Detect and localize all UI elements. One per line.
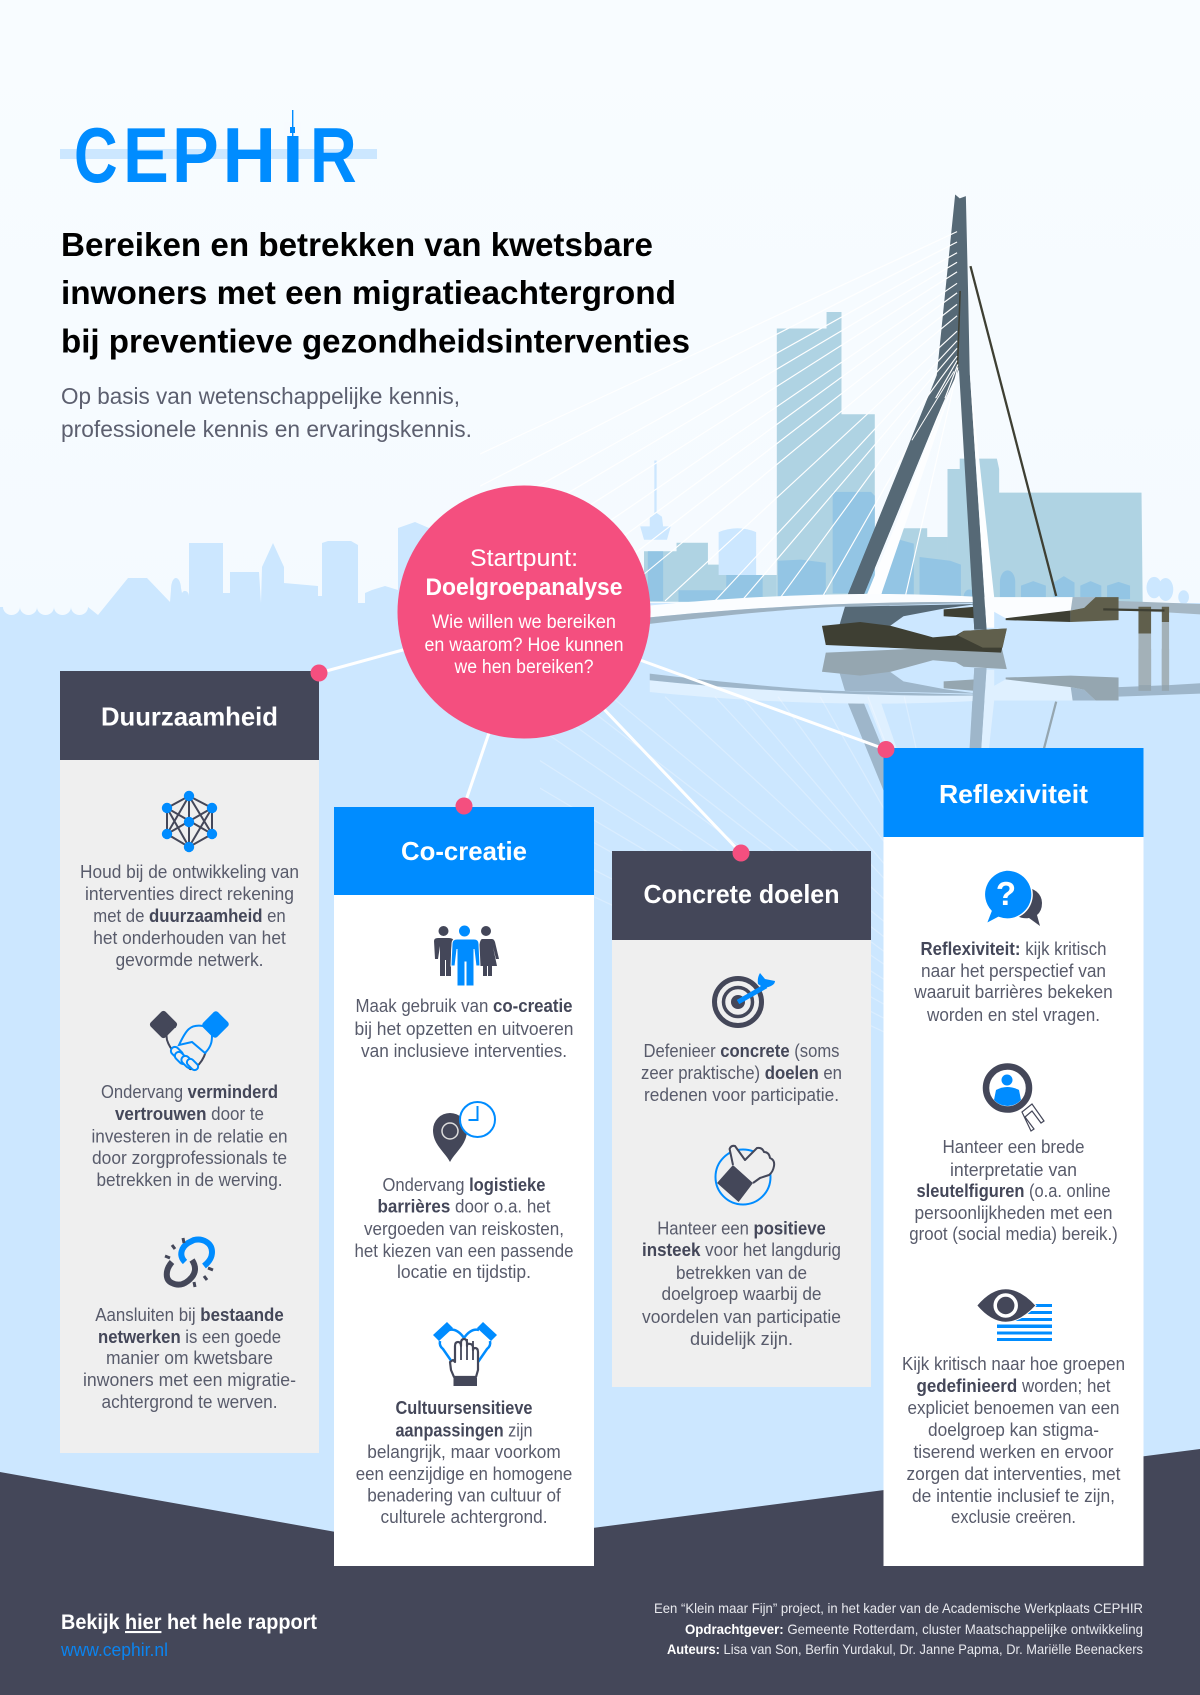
text block: een eenzijdige en homogene [356, 1464, 572, 1484]
text block: voordelen van participatie [642, 1307, 841, 1327]
text block: bij het opzetten en uitvoeren [354, 1019, 574, 1039]
pylon [848, 195, 987, 630]
reflected cables [540, 696, 916, 1032]
footer link [60, 1611, 317, 1660]
left skyline silhouette [0, 522, 650, 625]
logo tower [284, 122, 301, 136]
subtitle: professionele kennis en ervaringskennis. [61, 416, 472, 442]
lower mast [967, 486, 987, 630]
logo wordmark: R [310, 111, 357, 199]
panel header [60, 671, 319, 760]
right abutment [1071, 597, 1169, 633]
text block: de intentie inclusief te zijn, [912, 1486, 1115, 1506]
subtitle: Op basis van wetenschappelijke kennis, [61, 383, 460, 409]
text block: het kiezen van een passende [354, 1241, 574, 1261]
icon: network [162, 791, 217, 852]
connector dots [310, 664, 894, 862]
low-rise buildings left [644, 543, 777, 602]
footer link: Bekijk hier het hele rapport [61, 1611, 317, 1634]
panel: Concrete doelen [612, 851, 871, 1387]
text block: Hanteer een positieve [657, 1218, 826, 1238]
text block: betrekken in de werving. [96, 1170, 282, 1190]
text block: investeren in de relatie en [92, 1126, 288, 1146]
text block: netwerken is een goede [98, 1327, 281, 1347]
small houses and trees [964, 570, 1130, 599]
text block: vertrouwen door te [115, 1104, 264, 1124]
text block: interpretatie van [950, 1160, 1077, 1180]
text block: het onderhouden van het [93, 928, 286, 948]
text block: persoonlijkheden met een [914, 1203, 1112, 1223]
text block: benadering van cultuur of [367, 1486, 562, 1506]
text block: Cultuursensitieve [396, 1398, 532, 1418]
circle text: en waarom? Hoe kunnen [424, 635, 624, 656]
text block: gevormde netwerk. [116, 950, 264, 970]
text block: gedefinieerd worden; het [916, 1376, 1110, 1396]
text block: manier om kwetsbare [106, 1348, 273, 1368]
text block: met de duurzaamheid en [93, 906, 286, 926]
text block [356, 1398, 572, 1527]
title: bij preventieve gezondheidsinterventies [61, 322, 690, 360]
panel heading: Reflexiviteit [939, 779, 1088, 809]
text block: zorgen dat interventies, met [906, 1464, 1120, 1484]
right office block [947, 459, 1143, 603]
text block: sleutelfiguren (o.a. online [916, 1181, 1110, 1201]
footer credits: Opdrachtgever: Gemeente Rotterdam, cluster Maatschappelijke ontwikkeling [685, 1621, 1143, 1637]
logo wordmark: I [282, 111, 304, 199]
text block: barrières door o.a. het [378, 1196, 550, 1216]
text block: aanpassingen zijn [396, 1420, 532, 1440]
icon: thumbs up [716, 1146, 774, 1204]
panel: Reflexiviteit [884, 748, 1144, 1566]
logo wordmark: P [172, 111, 219, 199]
dark deck wedges [944, 607, 1071, 622]
icon: people [434, 925, 499, 986]
text block [83, 1305, 296, 1412]
text block: naar het perspectief van [921, 961, 1106, 981]
title: Bereiken en betrekken van kwetsbare [61, 226, 653, 263]
subtitle [61, 383, 472, 442]
text block [354, 1175, 574, 1282]
logo wordmark [74, 111, 357, 199]
footer link: www.cephir.nl [60, 1640, 168, 1660]
icon: speech bubbles [984, 870, 1042, 926]
text block: Kijk kritisch naar hoe groepen [902, 1354, 1125, 1374]
text block: Ondervang logistieke [382, 1175, 546, 1195]
text block [641, 1041, 842, 1105]
icon: raised hand with cuffs [433, 1322, 497, 1386]
text block: inwoners met een migratie- [83, 1370, 296, 1390]
circle text: we hen bereiken? [454, 657, 594, 678]
deck underside shadow [650, 602, 977, 624]
text block: insteek voor het langdurig [642, 1240, 841, 1260]
text block: van inclusieve interventies. [361, 1041, 567, 1061]
circle text: Startpunt: [470, 545, 578, 572]
footer credits: Een “Klein maar Fijn” project, in het kader van de Academische Werkplaats CEPHIR [654, 1600, 1143, 1616]
text block: duidelijk zijn. [690, 1329, 793, 1349]
connector lines [319, 648, 886, 853]
text block: worden en stel vragen. [926, 1005, 1100, 1025]
text block: exclusie creëren. [951, 1507, 1076, 1527]
text block: interventies direct rekening [85, 884, 294, 904]
deck [650, 594, 1073, 618]
cables [480, 231, 958, 602]
logo band [60, 149, 377, 159]
title: inwoners met een migratieachtergrond [61, 274, 676, 311]
Euromast tower [640, 461, 671, 540]
text block: belangrijk, maar voorkom [367, 1442, 561, 1462]
text block [642, 1218, 841, 1349]
skyline behind the bridge [640, 312, 1189, 604]
circle text: Wie willen we bereiken [432, 612, 616, 633]
pylon shadow stripe [957, 291, 960, 369]
right deck shadow band [1071, 597, 1200, 614]
tall tower building [777, 312, 875, 601]
text block: doelgroep waarbij de [662, 1284, 822, 1304]
icon: person under magnifier [986, 1066, 1044, 1131]
panel header [884, 748, 1144, 837]
logo [60, 110, 377, 199]
pillar reflections [1138, 622, 1169, 685]
text block: betrekken van de [676, 1263, 807, 1283]
leg cable highlight [912, 371, 954, 440]
lower pylon leg [839, 604, 977, 626]
text block [913, 939, 1113, 1025]
text block: door zorgprofessionals te [92, 1148, 287, 1168]
icon: eye with stripes [977, 1289, 1052, 1341]
panel: Co-creatie [334, 807, 594, 1566]
text block [909, 1137, 1118, 1244]
white leg highlights [867, 371, 994, 628]
text block: Reflexiviteit: kijk kritisch [920, 939, 1106, 959]
logo wordmark: H [222, 111, 276, 199]
text block [92, 1082, 288, 1190]
text block: waaruit barrières bekeken [913, 982, 1113, 1002]
footer credits [654, 1600, 1143, 1657]
text block: Houd bij de ontwikkeling van [80, 862, 299, 882]
Erasmus bridge [480, 194, 1200, 685]
text block: achtergrond te werven. [102, 1392, 278, 1412]
text block: culturele achtergrond. [380, 1507, 548, 1527]
logo wordmark: C [74, 111, 118, 199]
icon: handshake [149, 1010, 230, 1072]
circle text [424, 545, 624, 678]
icon: target and dart [714, 973, 775, 1026]
lower left leg over the cables [848, 398, 945, 594]
footer credits: Auteurs: Lisa van Son, Berfin Yurdakul, Dr. Janne Papma, Dr. Mariëlle Beenackers [667, 1641, 1143, 1657]
icon: broken link [165, 1238, 213, 1287]
text block: locatie en tijdstip. [397, 1262, 531, 1282]
panel header [334, 807, 594, 895]
pale trees [1146, 577, 1189, 604]
text block: Maak gebruik van co-creatie [356, 996, 572, 1016]
panel heading: Concrete doelen [644, 879, 840, 909]
text block: tiserend werken en ervoor [914, 1442, 1114, 1462]
panel heading: Co-creatie [401, 836, 527, 866]
centre right low block [881, 528, 947, 599]
panel heading: Duurzaamheid [101, 702, 278, 732]
text block [902, 1354, 1125, 1527]
text block [80, 862, 299, 970]
text block: groot (social media) bereik.) [909, 1224, 1118, 1244]
pale office block [719, 528, 756, 575]
text block: doelgroep kan stigma- [928, 1420, 1099, 1440]
text block [354, 996, 574, 1061]
text block: Hanteer een brede [942, 1137, 1084, 1157]
main pier [822, 622, 1007, 653]
bridge reflection in the water [540, 648, 1200, 1032]
icon: speech bubbles: ? [996, 875, 1016, 912]
abutment bar [1103, 609, 1164, 611]
back stay [970, 266, 1056, 596]
water [0, 603, 1200, 1695]
reflected structure [650, 648, 1200, 790]
text block: Ondervang verminderd [101, 1082, 278, 1102]
start circle [398, 486, 650, 738]
text block: expliciet benoemen van een [908, 1398, 1120, 1418]
logo wordmark: E [123, 111, 169, 199]
title [61, 226, 690, 360]
circle text: Doelgroepanalyse [426, 574, 622, 601]
text block: zeer praktische) doelen en [641, 1063, 842, 1083]
panel: Duurzaamheid [60, 671, 319, 1453]
bottom dark band [0, 1449, 1200, 1695]
mid-blue foreground blocks [648, 492, 875, 602]
text block: Defenieer concrete (soms [644, 1041, 840, 1061]
panel header [612, 851, 871, 940]
text block: redenen voor participatie. [644, 1085, 839, 1105]
text block: vergoeden van reiskosten, [364, 1219, 564, 1239]
pier light side [958, 629, 1007, 648]
blue blocks right of leg [881, 538, 961, 597]
text block: Aansluiten bij bestaande [95, 1305, 284, 1325]
icon: location and clock [433, 1102, 495, 1162]
